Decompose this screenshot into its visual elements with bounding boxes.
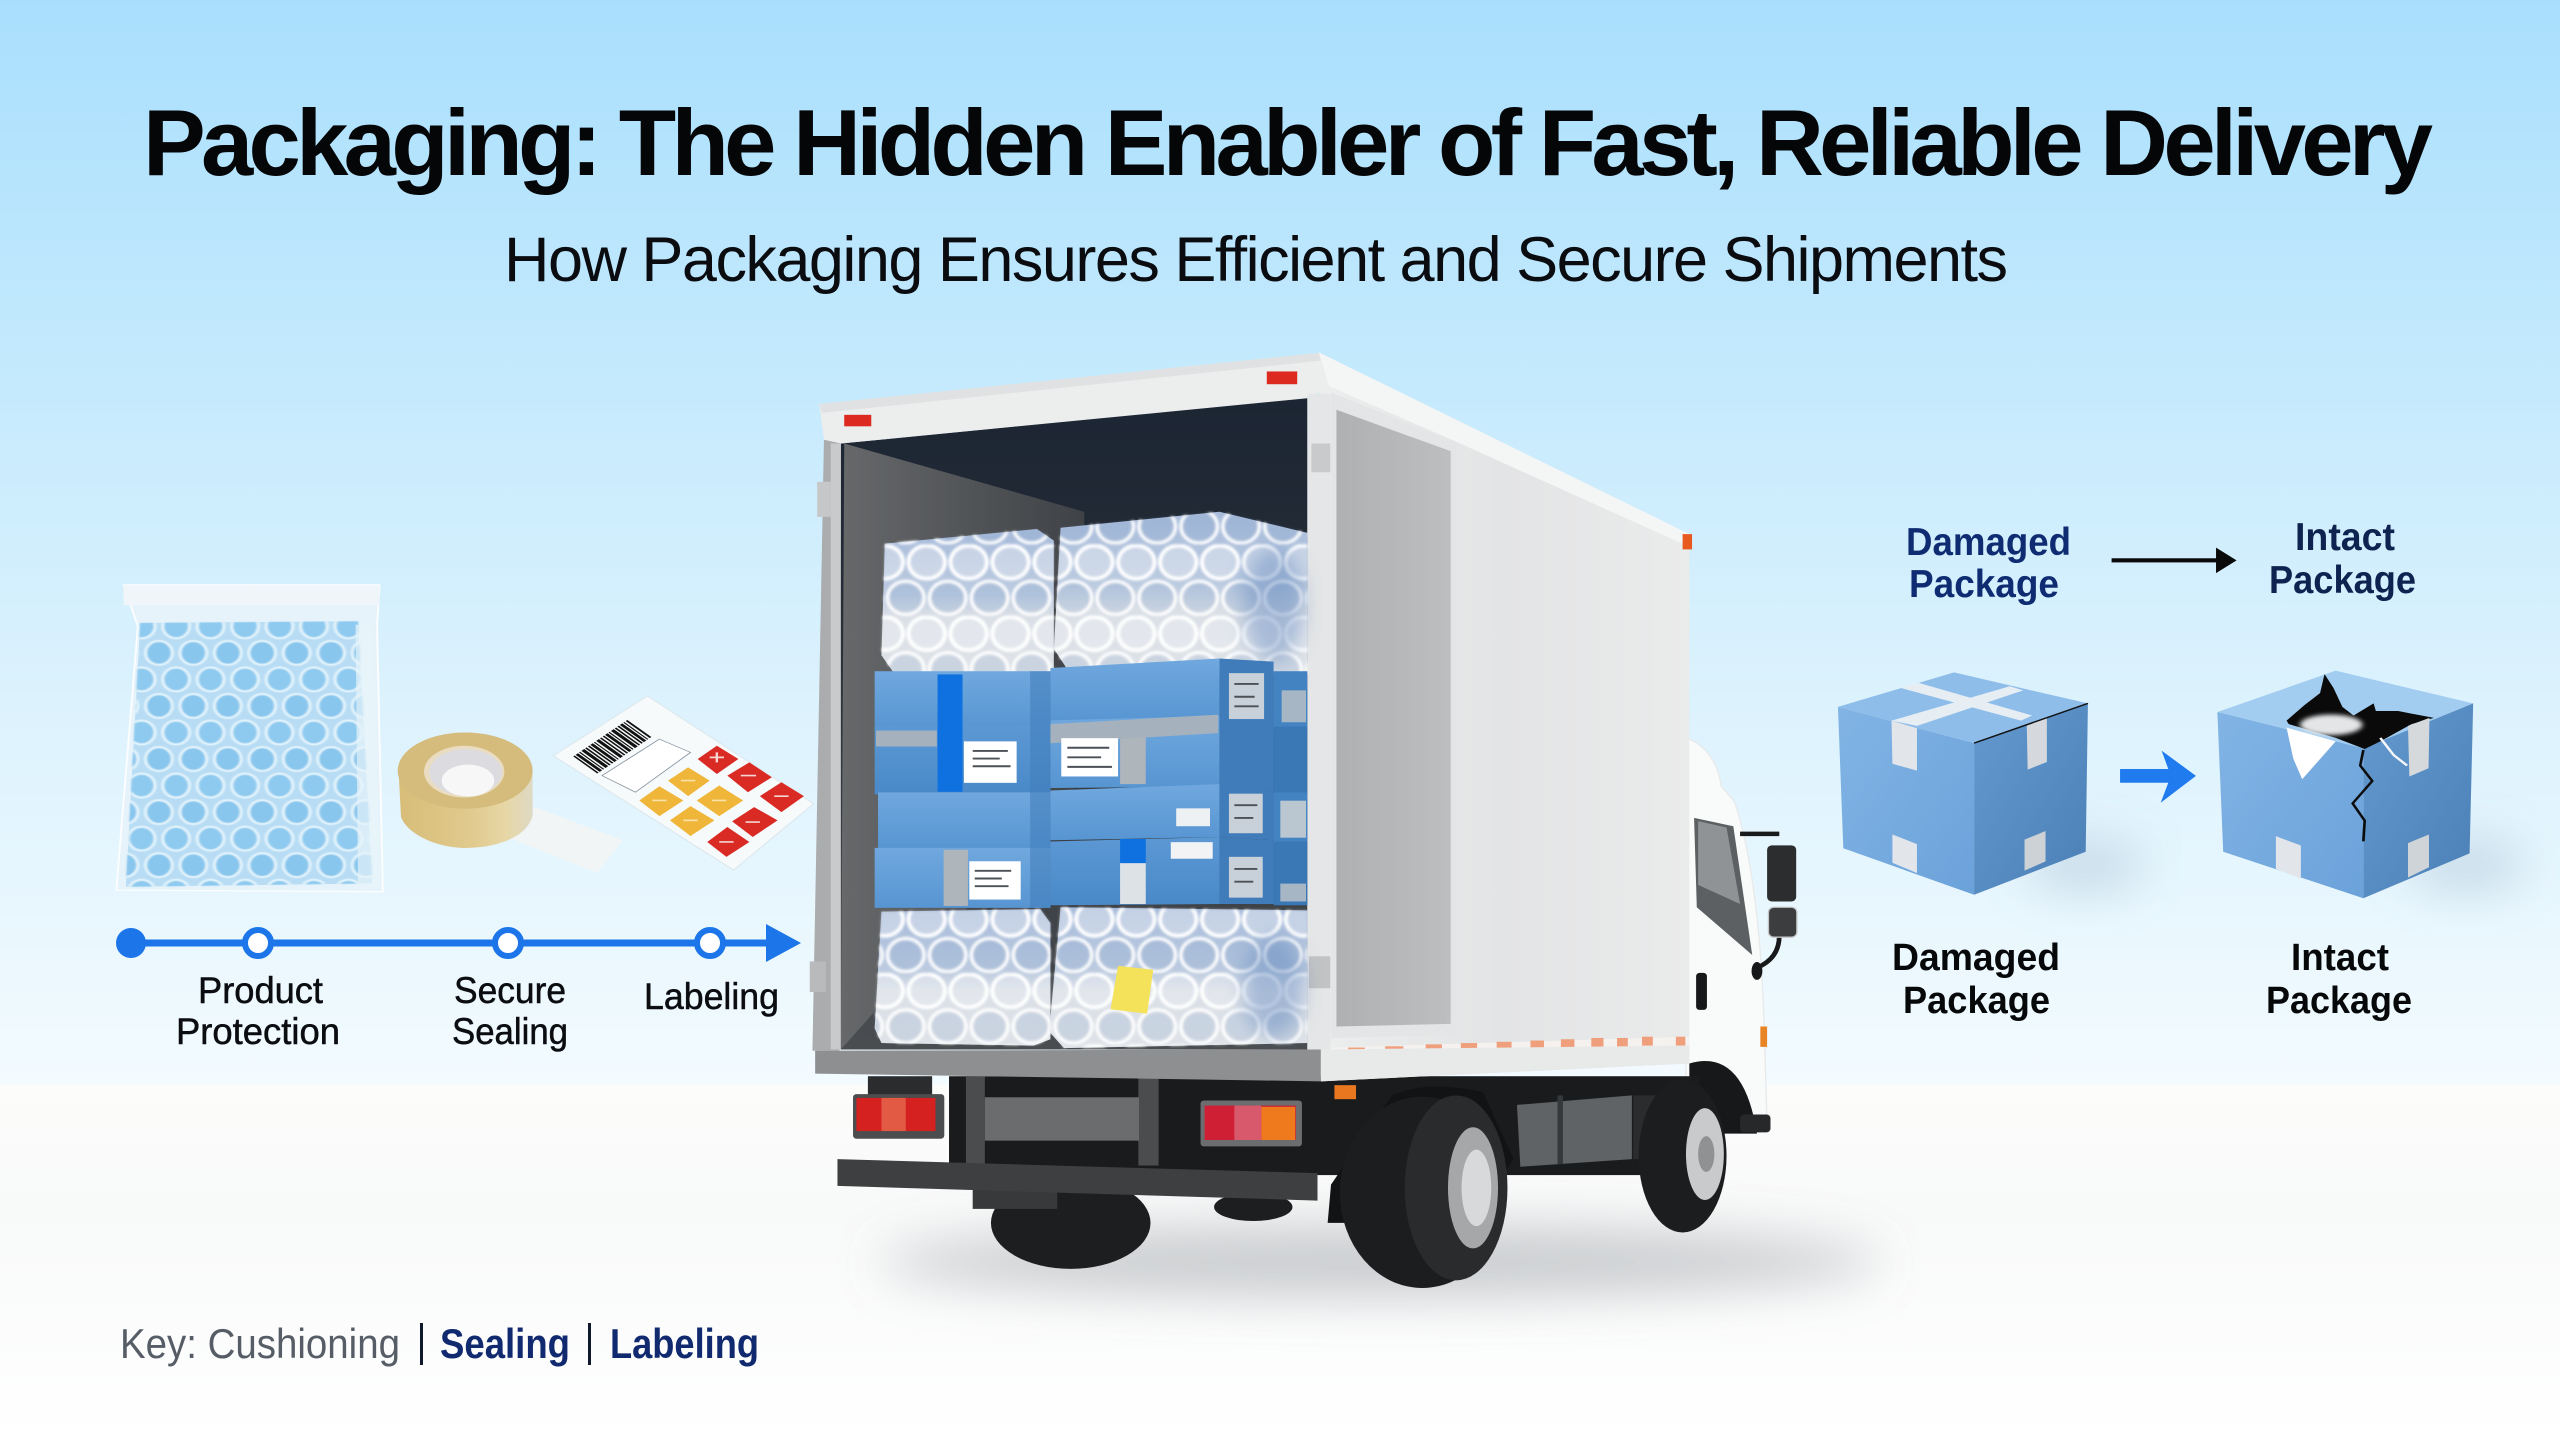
title: Packaging: The Hidden Enabler of Fast, Reliable Delivery [143, 90, 2433, 195]
label: product protection: Protection [176, 1011, 340, 1052]
process timeline [116, 924, 801, 1052]
rear inner wheels [991, 1177, 1292, 1269]
label: damaged package: Damaged [1892, 937, 2060, 979]
floor edge highlight [1321, 1046, 1689, 1081]
tail light: right [1201, 1100, 1302, 1146]
truck ground shadow [880, 1226, 1880, 1298]
key: cushioning: Key: Cushioning [120, 1320, 400, 1367]
side roof edge [1319, 352, 1689, 547]
box shadow: right [2405, 841, 2525, 889]
timeline line [131, 940, 770, 946]
arrow: damaged to intact header [2112, 548, 2237, 573]
bubble-wrapped pallet: lower left [875, 909, 1050, 1046]
panel: packaging materials [116, 585, 813, 892]
label: secure sealing: Secure [454, 970, 566, 1011]
icon: taped blue box [1838, 672, 2088, 895]
timeline node: product protection [245, 930, 271, 956]
header: damaged package: Package [1909, 563, 2059, 606]
label: intact package: Intact [2291, 937, 2389, 979]
tail light: left [853, 1094, 944, 1139]
header: intact package: Intact [2295, 516, 2395, 559]
key separator [588, 1323, 591, 1365]
header: intact package: Package [2269, 559, 2416, 602]
label: damaged package: Package [1903, 980, 2050, 1022]
bubble-wrapped pallet: upper left [881, 529, 1054, 674]
yellow sticker [1111, 966, 1153, 1014]
box shadow: left [2025, 841, 2145, 889]
red marker lights [844, 371, 1297, 426]
cargo floor [815, 1049, 1321, 1081]
label: labeling: Labeling [644, 976, 779, 1017]
header: damaged package: Damaged [1906, 521, 2071, 564]
timeline start dot [116, 928, 146, 958]
key separator [420, 1323, 423, 1365]
label: product protection: Product [198, 970, 324, 1011]
key: sealing: Sealing [440, 1320, 570, 1367]
icon: shipping label sheet [553, 696, 813, 870]
timeline node: labeling [697, 930, 723, 956]
background sky [0, 0, 2560, 1090]
rear frame [810, 353, 1330, 1051]
box side wall [1319, 354, 1689, 1081]
bubble-wrapped pallet: lower right [1049, 907, 1307, 1048]
side corner marker [1683, 534, 1692, 549]
chassis [868, 1076, 1699, 1175]
open rear door [1331, 393, 1457, 1038]
rear wheel [1328, 1087, 1514, 1288]
subtitle: How Packaging Ensures Efficient and Secure Shipments [504, 225, 2008, 295]
underride frame [966, 1076, 1159, 1209]
timeline node: secure sealing [495, 930, 521, 956]
reflective strip [1331, 1037, 1689, 1060]
icon: packing tape roll [398, 732, 623, 873]
label: secure sealing: Sealing [452, 1011, 568, 1052]
cab [1686, 738, 1797, 1134]
bumper [837, 1159, 1317, 1201]
cargo interior [839, 398, 1307, 1049]
blue cartons stack [875, 658, 1307, 908]
delivery truck [810, 352, 1797, 1288]
timeline arrowhead [766, 924, 801, 962]
label: intact package: Package [2266, 980, 2412, 1022]
icon: bubble wrap bag [116, 585, 383, 892]
arrow: blue transition [2120, 751, 2196, 803]
bubble-wrapped pallet: upper right [1054, 512, 1307, 674]
key legend [120, 1320, 759, 1367]
key: labeling: Labeling [610, 1320, 759, 1367]
orange side marker [1334, 1085, 1356, 1099]
background ground [0, 1085, 2560, 1440]
panel: package comparison [1838, 516, 2525, 1022]
front wheel [1639, 1079, 1727, 1232]
icon: torn blue box [2217, 671, 2473, 898]
